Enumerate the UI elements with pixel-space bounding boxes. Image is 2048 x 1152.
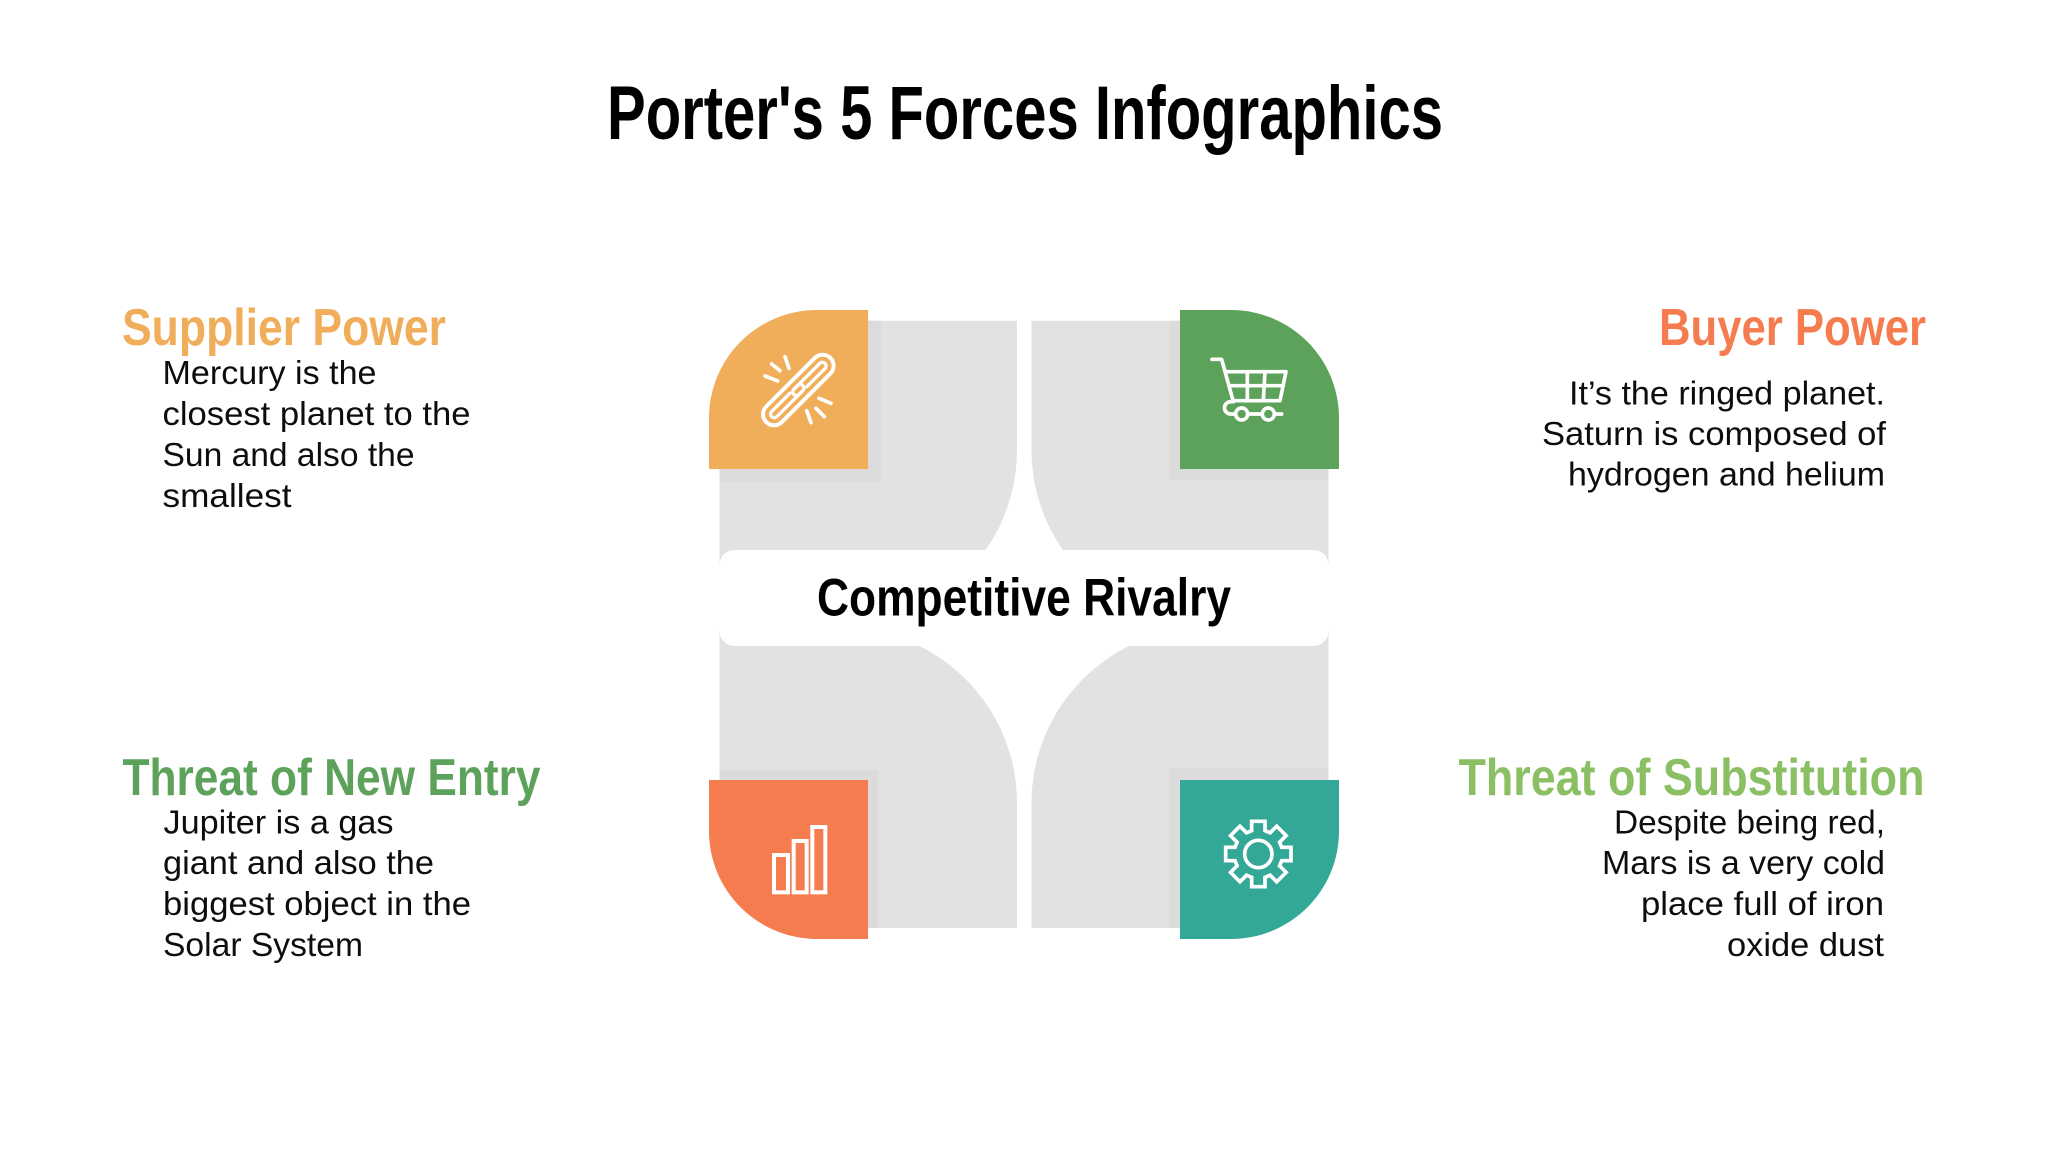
body text: Buyer Power: hydrogen and helium	[1568, 456, 1885, 493]
tile: threat of substitution (teal)	[1180, 780, 1339, 939]
tile: supplier power (yellow)	[709, 310, 868, 469]
body text: Supplier Power	[162, 354, 470, 514]
shadow: bottom-left tile	[720, 770, 878, 928]
icon: gear	[1226, 821, 1291, 887]
tile: threat of new entry (orange)	[709, 780, 868, 939]
body text: Supplier Power: closest planet to the	[162, 395, 470, 432]
body text: Threat of Substitution: Despite being red,	[1614, 803, 1885, 840]
icon: bar chart	[774, 827, 825, 892]
text block: Buyer Power	[1542, 299, 1926, 493]
icon: shopping cart	[1212, 359, 1286, 420]
body text: Threat of New Entry: biggest object in the	[163, 885, 471, 922]
shadow: top-left tile	[720, 321, 881, 482]
body text: Threat of Substitution: Mars is a very cold	[1602, 844, 1885, 881]
heading: Supplier Power: Supplier Power	[122, 299, 446, 357]
panel: bottom-left grey quadrant	[720, 628, 1017, 928]
body text: Threat of Substitution	[1602, 803, 1885, 963]
heading: Threat of Substitution: Threat of Substitution	[1458, 749, 1924, 807]
panel: top-left grey quadrant	[720, 321, 1017, 625]
panel: bottom-right grey quadrant	[1032, 628, 1328, 928]
body text: Threat of New Entry	[163, 803, 471, 963]
body text: Buyer Power	[1542, 374, 1887, 493]
body text: Buyer Power: It’s the ringed planet.	[1569, 374, 1885, 411]
tile: buyer power (green)	[1180, 310, 1339, 469]
panel: top-right grey quadrant	[1032, 321, 1328, 625]
body text: Threat of New Entry: Solar System	[163, 926, 363, 963]
text block: Supplier Power	[122, 299, 470, 514]
body text: Threat of Substitution: oxide dust	[1727, 926, 1884, 963]
shadow: bottom-right tile	[1170, 768, 1328, 928]
center label: Competitive Rivalry: Competitive Rivalry	[817, 568, 1231, 628]
body text: Threat of Substitution: place full of iron	[1641, 885, 1884, 922]
body text: Threat of New Entry: Jupiter is a gas	[164, 803, 394, 840]
title: Porter's 5 Forces Infographics	[607, 71, 1443, 156]
heading: Threat of New Entry: Threat of New Entry	[122, 749, 541, 807]
panel: central diagram	[709, 310, 1339, 939]
shadow: top-right tile	[1170, 321, 1328, 480]
body text: Threat of New Entry: giant and also the	[163, 844, 434, 881]
body text: Supplier Power: Mercury is the	[162, 354, 376, 391]
text block: Threat of New Entry	[122, 749, 541, 963]
body text: Buyer Power: Saturn is composed of	[1542, 415, 1887, 452]
body text: Supplier Power: smallest	[162, 477, 292, 514]
text block: Threat of Substitution	[1458, 749, 1924, 963]
icon: broken chain link	[758, 350, 838, 430]
heading: Buyer Power: Buyer Power	[1659, 299, 1926, 357]
center label band	[720, 550, 1328, 646]
body text: Supplier Power: Sun and also the	[162, 436, 414, 473]
